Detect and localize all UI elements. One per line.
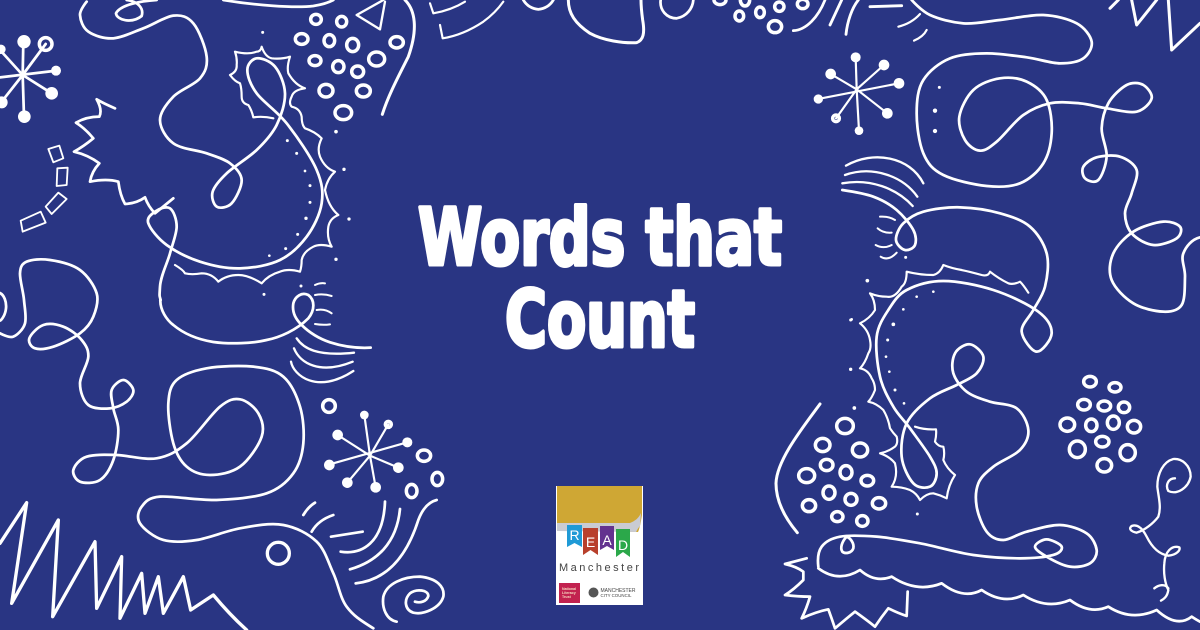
asterisk icon — [814, 52, 904, 135]
long looping line — [912, 0, 1200, 312]
small loop — [841, 537, 853, 553]
book pages — [557, 513, 641, 532]
small left loop — [0, 293, 6, 321]
concentric arcs — [291, 338, 354, 382]
title: Words that — [418, 194, 782, 284]
blobs — [523, 0, 553, 9]
wavy line — [818, 568, 1200, 622]
banner E: E — [586, 534, 595, 550]
dashes — [876, 217, 897, 258]
zigzag — [74, 99, 173, 213]
title: Count — [505, 276, 695, 366]
panel: right bottom doodles — [776, 190, 1200, 628]
spiral — [383, 577, 444, 622]
concentric arcs — [842, 157, 923, 206]
spiky outline — [860, 265, 1028, 500]
big looping line — [818, 190, 1097, 567]
ring — [323, 400, 335, 412]
curved stroke — [793, 0, 825, 31]
Manchester City Council crest — [588, 588, 636, 598]
National Literacy Trust badge: Literacy — [562, 591, 576, 595]
National Literacy Trust badge — [559, 583, 580, 603]
ribbon arcs — [430, 2, 503, 38]
asterisk icon — [0, 35, 61, 123]
panel: left top doodles — [0, 0, 414, 313]
rings — [406, 450, 443, 498]
National Literacy Trust badge: National — [562, 587, 576, 591]
title — [418, 194, 782, 366]
dashes by loop — [315, 283, 332, 313]
looping line — [80, 2, 322, 300]
logo: Read Manchester — [556, 486, 643, 605]
banner A: A — [602, 532, 612, 548]
dots — [850, 86, 941, 321]
dots — [261, 31, 351, 296]
dash — [315, 321, 330, 328]
Manchester City Council crest: MANCHESTER — [600, 588, 636, 594]
top lines — [223, 0, 333, 7]
curved stroke and triangle — [382, 0, 414, 114]
panel: left bottom doodles — [0, 259, 444, 630]
logo wordmark: Manchester — [559, 562, 639, 574]
ring dots — [714, 0, 808, 33]
zigzag — [0, 503, 247, 630]
panel: top centre doodles — [430, 0, 808, 43]
logo card — [556, 486, 643, 605]
ring — [267, 542, 289, 564]
action strokes — [830, 0, 902, 34]
asterisk icon — [324, 411, 412, 493]
gold book cover — [557, 486, 642, 532]
ring dots cluster — [295, 14, 403, 120]
dots — [849, 318, 919, 515]
curve with small loop — [160, 294, 371, 348]
small spiral line — [1130, 459, 1191, 601]
National Literacy Trust badge: Trust — [562, 595, 572, 599]
small rectangles — [21, 146, 68, 232]
panel: right top doodles — [793, 0, 1200, 321]
curved stroke — [776, 404, 820, 533]
spiky bottom shape — [785, 558, 908, 628]
action strokes — [303, 500, 437, 583]
spiky outline — [175, 47, 338, 283]
Manchester City Council crest: CITY COUNCIL — [600, 593, 632, 598]
banner D: D — [618, 537, 628, 553]
banner R: R — [569, 527, 580, 543]
right ring dots cluster — [1060, 376, 1141, 472]
long looping line — [0, 259, 373, 628]
left ring dots cluster — [799, 418, 886, 526]
zigzag top right — [1110, 0, 1200, 50]
